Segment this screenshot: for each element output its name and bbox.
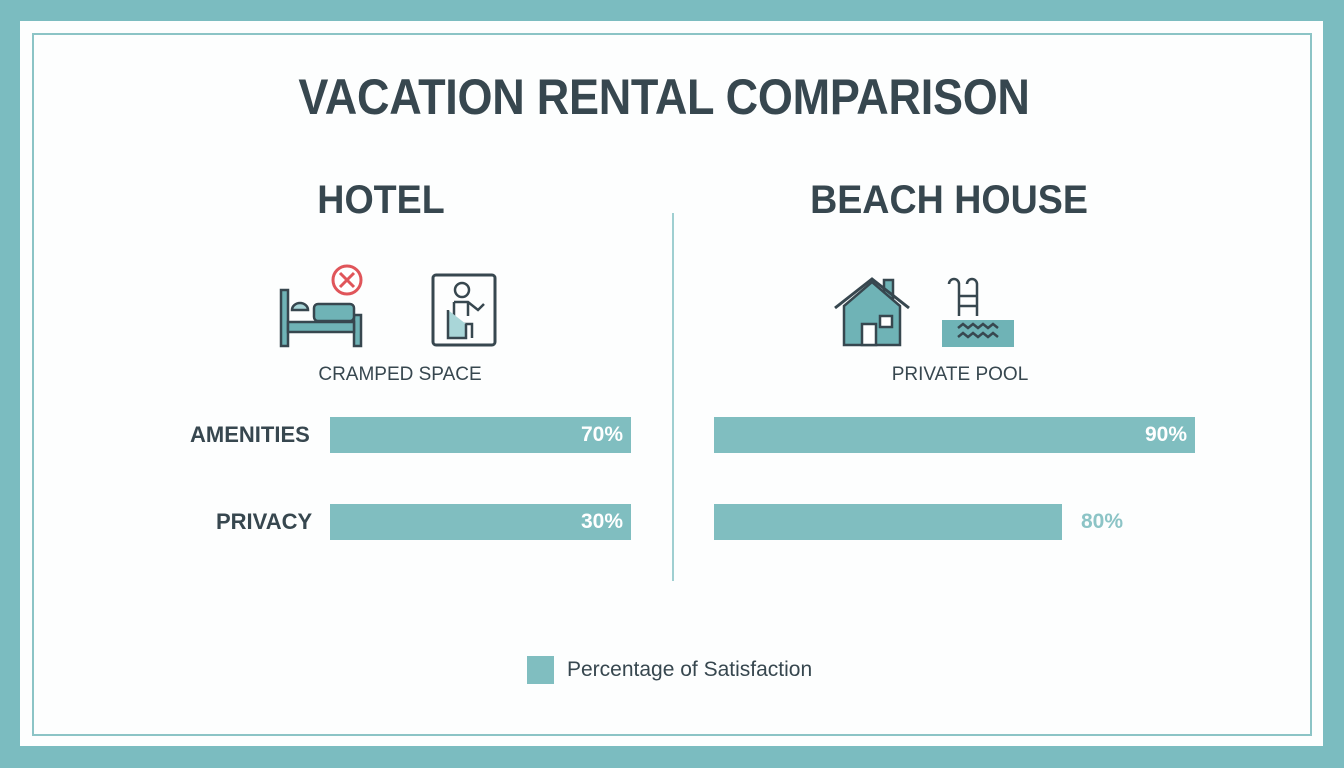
label: amenities: AMENITIES <box>190 422 310 447</box>
legend: Percentage of Satisfaction <box>567 658 812 681</box>
bar: hotel privacy 30%: 30% <box>581 510 623 533</box>
title: VACATION RENTAL COMPARISON <box>298 69 1030 125</box>
icon: seated person <box>432 274 496 346</box>
bar: hotel amenities 70% <box>330 417 631 453</box>
icon: house <box>834 277 910 346</box>
divider <box>672 213 674 581</box>
bar: beach privacy 80% <box>714 504 1062 540</box>
label: privacy: PRIVACY <box>216 509 312 534</box>
heading: hotel: HOTEL <box>317 178 445 222</box>
bar: beach amenities 90% <box>714 417 1195 453</box>
icon: bed with x <box>280 264 362 348</box>
text: private pool: PRIVATE POOL <box>892 364 1028 385</box>
text: cramped space: CRAMPED SPACE <box>318 364 482 385</box>
bar: beach amenities 90%: 90% <box>1145 423 1187 446</box>
icon: pool <box>942 278 1014 347</box>
value: 80%: 80% <box>1081 510 1123 533</box>
bar: hotel privacy 30% <box>330 504 631 540</box>
bar: hotel amenities 70%: 70% <box>581 423 623 446</box>
heading: beach house: BEACH HOUSE <box>810 178 1088 222</box>
